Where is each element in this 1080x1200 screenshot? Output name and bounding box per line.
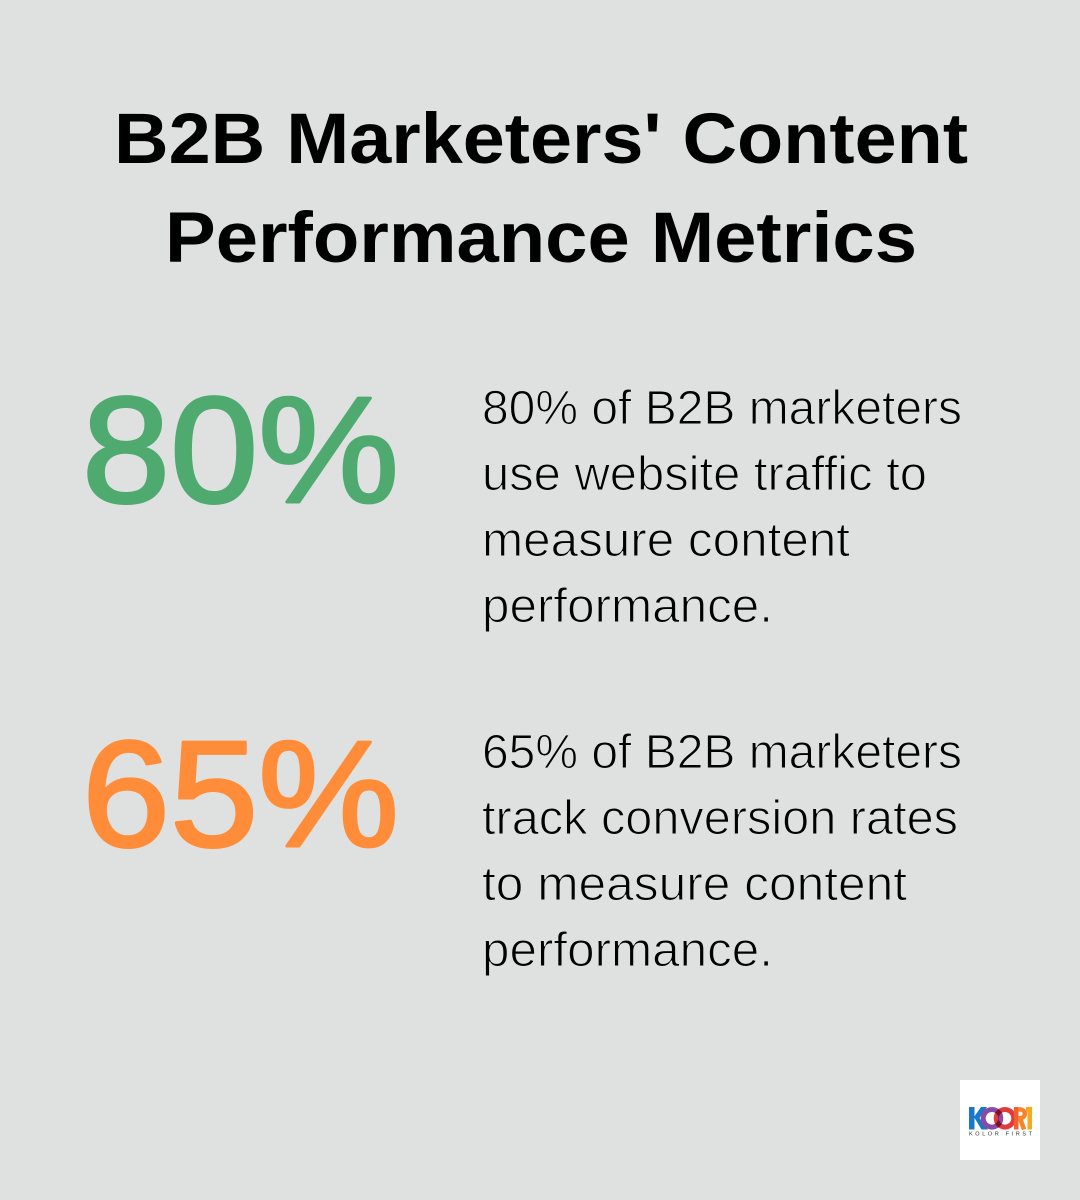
text block: website traffic: performance. xyxy=(482,580,773,633)
title xyxy=(114,100,968,278)
text block: website traffic xyxy=(482,382,962,633)
title: B2B Marketers' Content xyxy=(114,100,968,179)
text block: conversion rates: 65% of B2B marketers xyxy=(482,726,962,779)
logo: Koor1 Kolor First xyxy=(960,1080,1040,1160)
text block: website traffic: use website traffic to xyxy=(482,448,927,501)
logo letter R xyxy=(1014,1107,1025,1130)
text block: conversion rates: track conversion rates xyxy=(482,792,958,845)
text block: conversion rates: performance. xyxy=(482,924,773,977)
logo numeral 1 xyxy=(1026,1107,1032,1130)
text block: website traffic: measure content xyxy=(482,514,850,567)
stat: 65%: 65% xyxy=(82,709,399,878)
logo rings xyxy=(983,1110,1014,1127)
logo letter K xyxy=(969,1107,988,1130)
text block: conversion rates: to measure content xyxy=(482,858,907,911)
text block: conversion rates xyxy=(482,726,962,977)
title: Performance Metrics xyxy=(165,199,917,278)
text block: website traffic: 80% of B2B marketers xyxy=(482,382,962,435)
stat: 80%: 80% xyxy=(82,365,399,534)
logo tagline: KOLOR FIRST xyxy=(969,1132,1033,1138)
